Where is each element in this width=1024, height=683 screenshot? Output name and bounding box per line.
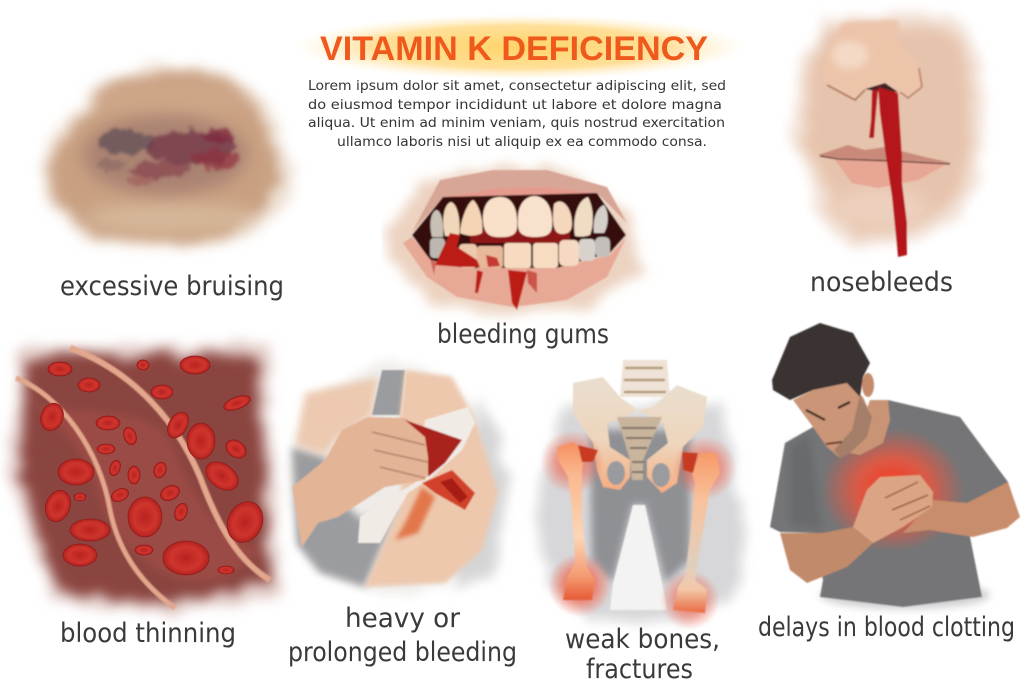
lips — [412, 170, 627, 232]
title: VITAMIN K DEFICIENCY — [320, 30, 708, 68]
bruise marks — [97, 129, 239, 185]
blood — [430, 233, 537, 310]
panel: blood thinning — [10, 346, 280, 649]
panel: weak bones, fractures — [538, 360, 745, 683]
illustration: nose and lips with blood — [792, 16, 984, 257]
illustration: bruised skin — [40, 64, 292, 248]
label: blood thinning — [60, 618, 236, 649]
intro text block: Lorem ipsum dolor sit amet, consectetur adipiscing elit, sed — [308, 78, 726, 94]
panel: bleeding gums — [387, 165, 645, 350]
illustration: man clutching chest — [770, 323, 1020, 609]
intro text block: ullamco laboris nisi ut aliquip ex ea commodo consa. — [337, 134, 707, 150]
nose — [820, 20, 922, 100]
panel: excessive bruising — [40, 64, 292, 302]
label: bleeding gums — [437, 319, 609, 350]
hand — [292, 417, 435, 547]
upper teeth — [430, 196, 608, 237]
illustration: pelvis and leg bones — [538, 360, 745, 630]
intro text block: aliqua. Ut enim ad minim veniam, quis nostrud exercitation — [308, 115, 725, 131]
lower teeth — [430, 237, 610, 268]
panel: nosebleeds — [792, 16, 984, 298]
wound and smear — [395, 487, 435, 540]
neck — [850, 400, 890, 455]
label: heavy or — [345, 603, 460, 634]
illustration: blood vessels and red cells — [10, 346, 280, 616]
hip sockets — [578, 445, 598, 462]
label: nosebleeds — [810, 267, 953, 298]
label: prolonged bleeding — [288, 637, 517, 668]
shirt — [770, 400, 1008, 607]
blood on fingers — [405, 420, 462, 477]
right arm — [903, 482, 1020, 537]
cloth — [358, 407, 475, 543]
chest glow — [821, 428, 965, 552]
illustration: mouth with bleeding gums — [387, 165, 645, 316]
spine — [620, 360, 670, 397]
red glow at joints — [540, 430, 604, 494]
lips — [818, 145, 952, 163]
red blood cells — [37, 356, 269, 575]
label — [288, 603, 517, 668]
hand — [853, 475, 933, 543]
left arm — [780, 527, 873, 583]
panel: delays in blood clotting — [758, 323, 1020, 643]
hair — [772, 323, 870, 400]
title banner — [292, 14, 748, 80]
blood stream — [878, 87, 907, 257]
label — [565, 624, 720, 683]
intro text block: do eiusmod tempor incididunt ut labore et dolore magna — [308, 97, 722, 113]
femurs — [557, 442, 595, 600]
intro text block — [308, 78, 726, 150]
panel: heavy or prolonged bleeding — [287, 368, 517, 668]
face — [793, 383, 872, 458]
pelvis — [573, 377, 637, 490]
arm — [365, 370, 498, 587]
label: excessive bruising — [60, 271, 284, 302]
illustration: hand pressing cloth on wounded arm — [287, 368, 510, 592]
label: weak bones, — [565, 624, 720, 655]
